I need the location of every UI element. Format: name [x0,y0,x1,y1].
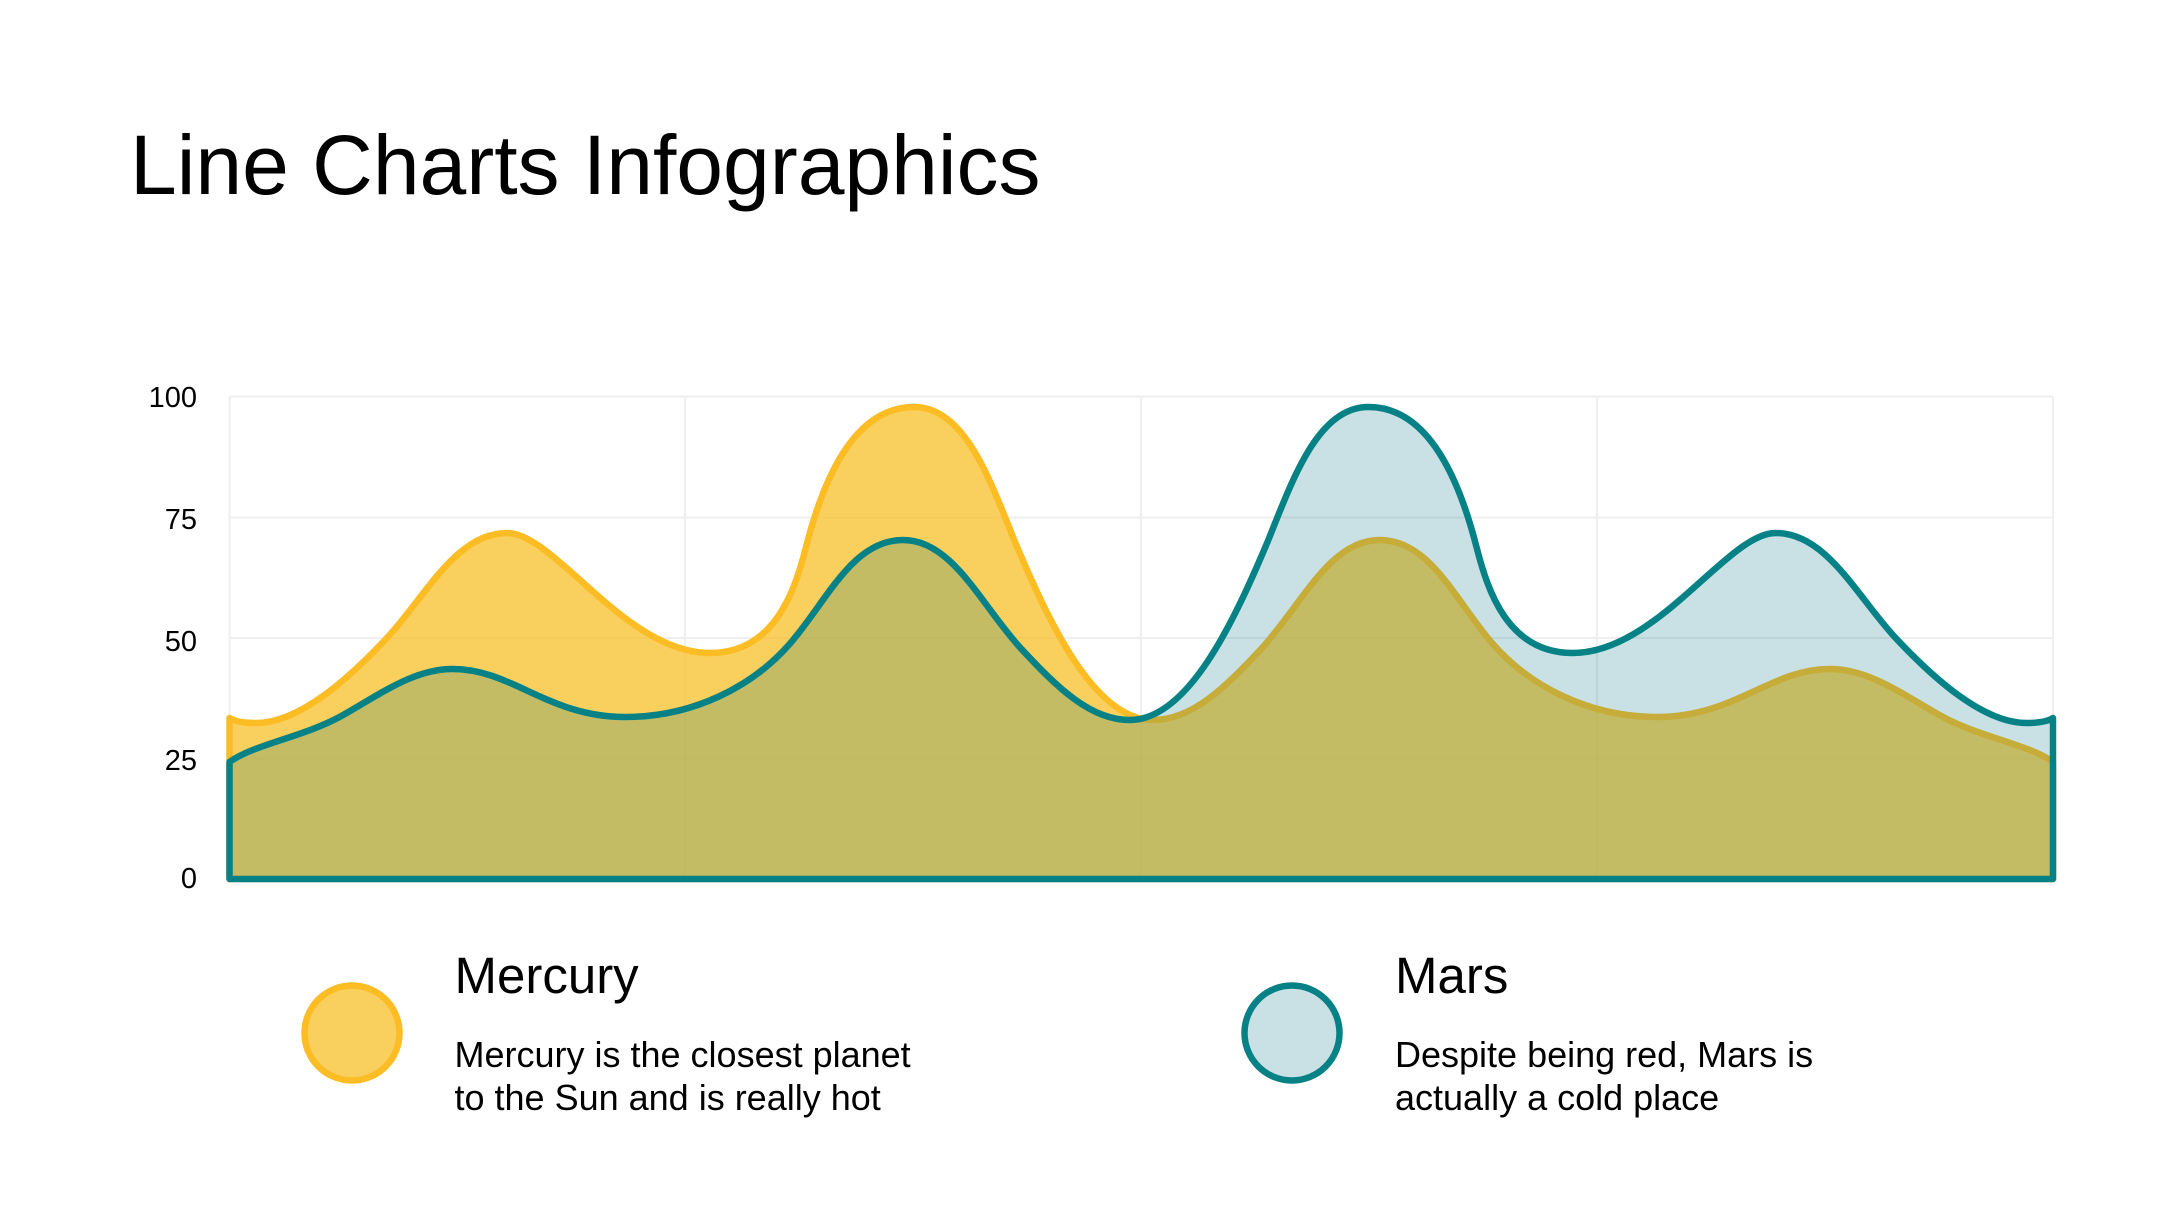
title: Line Charts Infographics [130,118,1041,212]
y axis labels: 0 [181,863,197,895]
y axis labels: 75 [165,504,197,536]
heading: Mercury: Mercury [454,947,639,1004]
y axis labels: 50 [165,626,197,658]
y axis labels: 100 [149,382,197,414]
legend: Mars [1244,947,1813,1118]
legend: Mercury [304,947,911,1118]
y axis labels: 25 [165,745,197,777]
text: Mercury description: to the Sun and is really hot [454,1077,881,1118]
y axis labels [149,382,197,895]
icon: Mars swatch [1244,986,1340,1080]
series: Mars area [230,407,2053,879]
icon: Mercury swatch [304,986,400,1080]
text: Mercury description: Mercury is the closest planet [454,1034,911,1075]
text: Mars description: Despite being red, Mars is [1395,1034,1813,1075]
text: Mars description: actually a cold place [1395,1077,1719,1118]
heading: Mars: Mars [1395,947,1508,1004]
series: Mercury area [230,407,2053,879]
area line chart [149,382,2053,895]
